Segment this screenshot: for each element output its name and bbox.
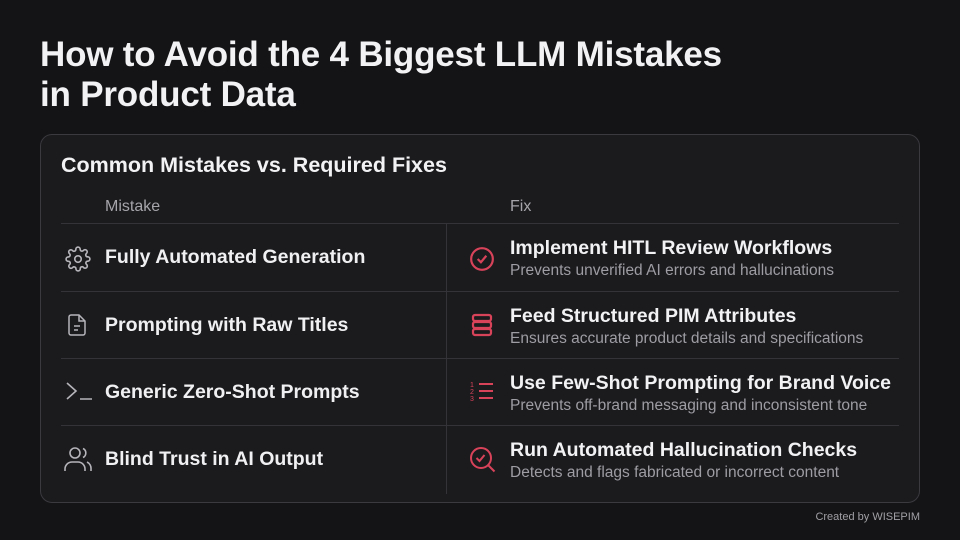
icon: numbered list — [470, 382, 493, 403]
fix 1: Implement HITL Review Workflows — [510, 237, 832, 259]
fix 3: Use Few-Shot Prompting for Brand Voice — [510, 372, 891, 394]
icon: document — [68, 314, 86, 336]
fix 2: Feed Structured PIM Attributes — [510, 305, 796, 327]
icon: terminal — [66, 382, 92, 400]
panel: comparison table: Ensures accurate product details and specifications — [510, 330, 863, 347]
title: in Product Data — [40, 75, 296, 114]
icon: gear — [65, 246, 91, 272]
panel: comparison table: Detects and flags fabricated or incorrect content — [510, 464, 839, 481]
icon: magnifier check — [470, 447, 496, 472]
icon: numbered list: 1 — [470, 382, 474, 389]
icon: numbered list: 2 — [470, 389, 474, 396]
icon: check circle — [470, 247, 494, 271]
mistake 2: Prompting with Raw Titles — [105, 314, 348, 336]
panel heading: Common Mistakes vs. Required Fixes — [61, 153, 447, 177]
panel: comparison table: Prevents unverified AI errors and hallucinations — [510, 262, 834, 279]
footer credit: Created by WISEPIM — [815, 511, 920, 523]
mistake 1: Fully Automated Generation — [105, 246, 365, 268]
panel: comparison table — [40, 134, 920, 503]
mistake 3: Generic Zero-Shot Prompts — [105, 381, 360, 403]
fix 4: Run Automated Hallucination Checks — [510, 439, 857, 461]
panel: comparison table: Prevents off-brand messaging and inconsistent tone — [510, 397, 867, 414]
title — [40, 35, 722, 114]
icon: users — [64, 447, 92, 471]
column header: fix: Fix — [510, 198, 531, 215]
column header: mistake: Mistake — [105, 198, 160, 215]
icon: numbered list: 3 — [470, 396, 474, 403]
icon: database — [472, 314, 492, 336]
mistake 4: Blind Trust in AI Output — [105, 448, 323, 470]
title: How to Avoid the 4 Biggest LLM Mistakes — [40, 35, 722, 74]
